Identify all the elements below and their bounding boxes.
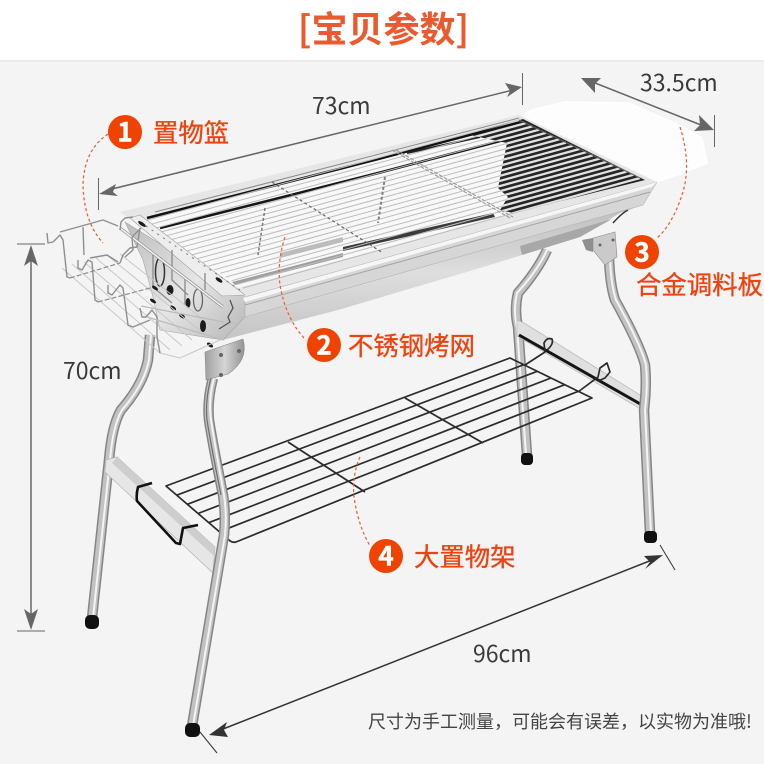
callout 3: seasoning board: 合金调料板 <box>636 266 763 302</box>
dimension label: 70cm: 70cm <box>63 352 122 386</box>
rear left leg <box>85 335 151 629</box>
grill rods <box>130 120 640 296</box>
dimension label: 96cm: 96cm <box>473 635 532 669</box>
callout 4: large shelf: 大置物架 <box>414 538 516 574</box>
dimension: 96cm arrow <box>200 545 675 753</box>
callout 2: grill mesh: 2 <box>316 326 332 362</box>
callout 3: seasoning board <box>625 232 763 302</box>
dimension: 33.5cm arrow <box>581 78 714 147</box>
left crossbar with black hooks <box>105 457 215 573</box>
callout 4: large shelf: 4 <box>378 536 394 574</box>
callout leader 1 <box>83 134 108 243</box>
callout leader 3 <box>657 127 687 238</box>
right crossbar with hooks <box>517 320 645 411</box>
callout 4: large shelf <box>369 536 516 574</box>
dimension label: 73cm: 73cm <box>312 87 371 121</box>
callout leader 2 <box>279 237 306 340</box>
tray end details <box>137 220 223 348</box>
dimension: 70cm arrow <box>17 244 45 631</box>
dimension label: 33.5cm: 33.5cm <box>640 64 718 98</box>
lower shelf wire rack <box>166 358 592 542</box>
callout 1: basket: 1 <box>117 112 133 150</box>
seasoning board <box>519 102 707 182</box>
wire basket <box>47 217 233 358</box>
dimension: 73cm arrow <box>98 73 522 210</box>
title: [宝贝参数] <box>298 1 469 53</box>
footnote: 尺寸为手工测量，可能会有误差，以实物为准哦! <box>368 708 752 734</box>
tray body <box>125 205 643 340</box>
illustration: barbecue grill <box>47 102 707 737</box>
right bracket <box>582 232 617 265</box>
rear right leg <box>515 250 547 465</box>
callout leader 4 <box>354 457 370 546</box>
callout 2: grill mesh: 不锈钢烤网 <box>348 327 475 363</box>
left bracket <box>205 339 244 380</box>
header band <box>0 0 764 62</box>
front right leg <box>609 258 657 543</box>
callout 1: basket: 置物篮 <box>153 114 229 150</box>
callout 1: basket <box>108 112 229 150</box>
front left leg <box>185 378 226 737</box>
tray rim and grill interior <box>120 115 657 317</box>
callout 3: seasoning board: 3 <box>634 232 650 270</box>
